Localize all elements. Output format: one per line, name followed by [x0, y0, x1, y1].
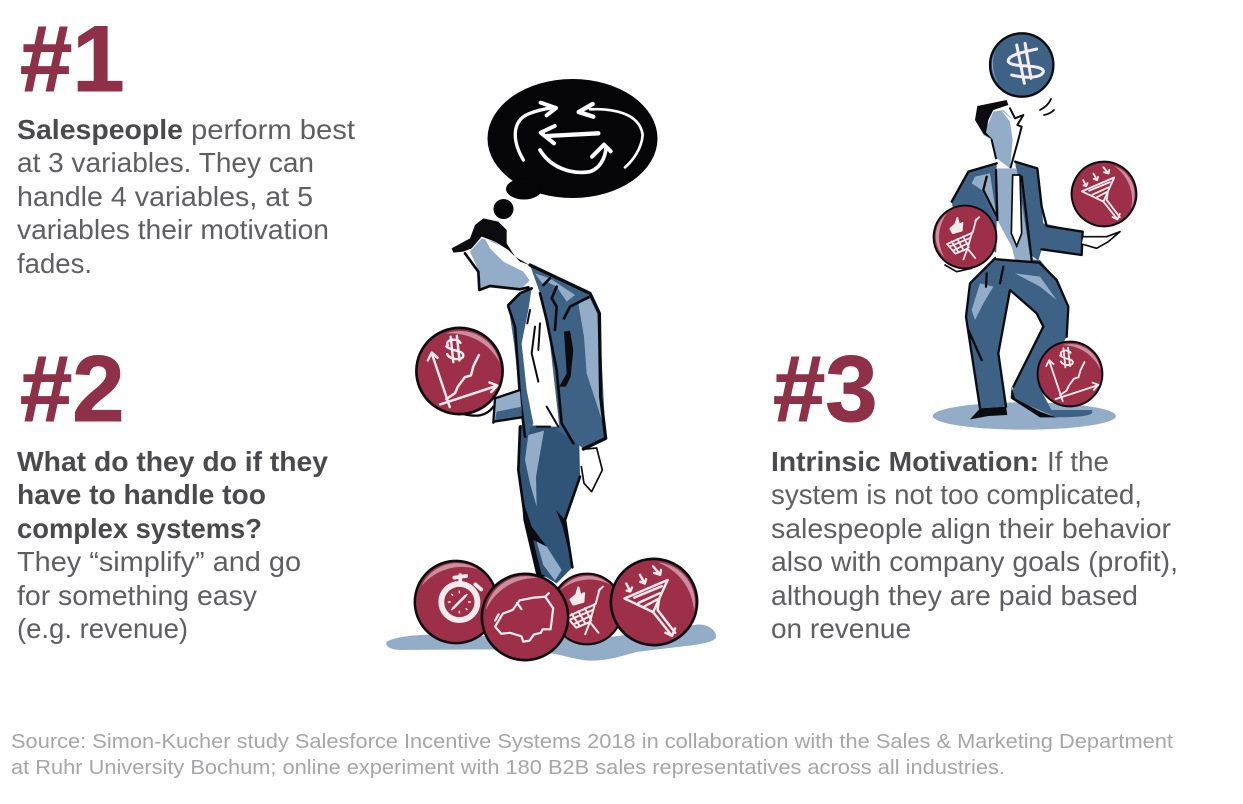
source note: Source: Simon-Kucher study Salesforce Incentive Systems 2018 in collaboration with the Sales & Marketing Department	[11, 730, 1173, 753]
text block: salespeople variables: perform best	[191, 114, 355, 145]
head	[975, 100, 1023, 168]
ball: dollar	[990, 33, 1053, 97]
text block: intrinsic motivation: If the	[1047, 446, 1109, 477]
text block: intrinsic motivation: although they are paid based	[771, 580, 1138, 611]
illustration: overwhelmed salesperson	[386, 79, 716, 674]
ball: shopping cart	[552, 574, 622, 644]
text block: salespeople variables: handle 4 variables, at 5	[17, 181, 313, 212]
ground shadow	[386, 625, 716, 661]
sleeve holding ball	[495, 391, 522, 421]
hands	[945, 260, 983, 272]
figure: torso, head, arm	[452, 218, 606, 449]
heading: #2: #2	[20, 336, 125, 441]
text block: salespeople variables: fades.	[17, 248, 92, 279]
shoes	[970, 407, 1007, 419]
text block: salespeople variables: at 3 variables. They can	[17, 147, 314, 178]
text block: salespeople variables: variables their motivation	[17, 214, 329, 245]
figure: legs and hand	[518, 425, 602, 583]
motion ticks	[1040, 99, 1054, 115]
text block: too complex systems: They “simplify” and go	[17, 546, 301, 577]
text block: salespeople variables	[17, 114, 355, 279]
text block: too complex systems: (e.g. revenue)	[17, 613, 188, 644]
text block: too complex systems: have to handle too	[17, 479, 266, 510]
text block: salespeople variables: Salespeople	[17, 114, 183, 145]
text block: intrinsic motivation: also with company goals (profit),	[771, 546, 1178, 577]
ball: funnel	[595, 543, 713, 661]
text block: intrinsic motivation	[771, 446, 1178, 644]
jacket	[952, 163, 997, 253]
text block: intrinsic motivation: on revenue	[771, 613, 911, 644]
source note: at Ruhr University Bochum; online experiment with 180 B2B sales representatives across all industries.	[11, 756, 1005, 779]
ball: chart held in hand	[399, 311, 520, 431]
ball: funnel	[1064, 154, 1144, 234]
ball: piggy bank	[468, 560, 582, 674]
source note	[11, 730, 1173, 779]
ball: shopping cart	[929, 201, 1001, 273]
text block: too complex systems: What do they do if they	[17, 446, 329, 477]
thought bubble with tangled arrows	[488, 79, 658, 219]
text block: intrinsic motivation: Intrinsic Motivation:	[771, 446, 1039, 477]
trousers	[966, 257, 1068, 417]
ball: stopwatch	[408, 554, 504, 650]
heading: #1: #1	[20, 6, 125, 111]
text block: intrinsic motivation: system is not too complicated,	[771, 479, 1142, 510]
illustration: motivated salesperson juggling	[929, 33, 1144, 430]
heading: #3: #3	[773, 336, 878, 441]
ball: chart	[1024, 328, 1116, 420]
text block: too complex systems: for something easy	[17, 580, 257, 611]
face	[470, 238, 530, 290]
ground shadow	[933, 402, 1116, 430]
text block: intrinsic motivation: salespeople align their behavior	[771, 513, 1171, 544]
shirt and tie	[997, 168, 1031, 261]
text block: too complex systems: complex systems?	[17, 513, 262, 544]
text block: too complex systems	[17, 446, 329, 644]
